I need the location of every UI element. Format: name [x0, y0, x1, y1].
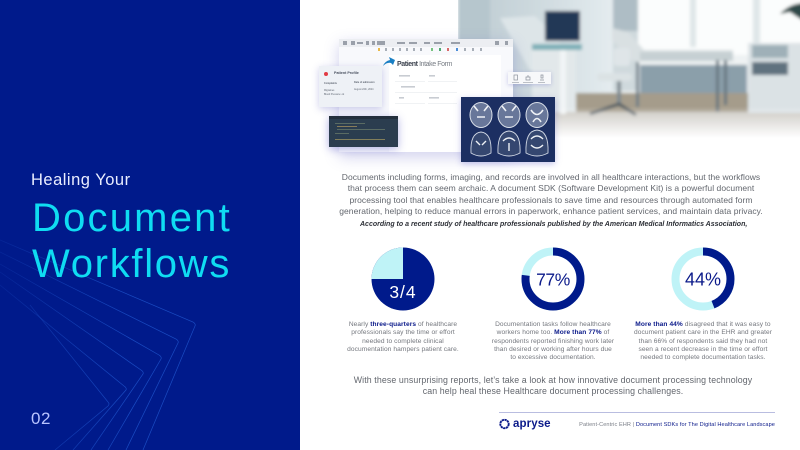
chart: 44% donut: 44% — [685, 270, 721, 290]
intro paragraph: generation, helping to reduce manual errors in paperwork, enhance patient services, and maintain data privacy. — [339, 206, 763, 216]
mockup: small action toolbar — [508, 72, 551, 84]
caption: 44%: document patient care in the EHR and greater — [634, 329, 772, 336]
caption: 44%: needed to complete documentation tasks. — [640, 354, 766, 361]
page number: 02 — [31, 409, 51, 428]
form fields — [395, 75, 457, 104]
card: patient profile: Complaints — [324, 82, 337, 85]
heading: Healing Your: Healing Your — [31, 171, 131, 189]
closing paragraph — [354, 375, 752, 396]
card: patient profile: August 24th, 2024 — [354, 88, 373, 91]
image: brain MRI scans — [461, 97, 555, 162]
panel: left blue panel — [0, 0, 300, 450]
profile text: Patient Profile — [334, 71, 359, 75]
mockup: document editor window — [339, 39, 513, 152]
logo: apryse — [499, 418, 551, 430]
icon: apryse mark — [499, 418, 510, 430]
caption: 77% — [492, 321, 614, 361]
caption: 44%: than 66% of respondents said they had not — [639, 338, 767, 345]
closing paragraph: With these unsurprising reports, let’s take a look at how innovative document processing technology — [354, 375, 752, 385]
caption: three-quarters: Nearly three-quarters of healthcare — [349, 321, 457, 328]
caption: three-quarters: needed to complete clinical — [362, 338, 444, 345]
card: patient profile: Date of admission — [354, 81, 375, 84]
caption: 77%: Documentation tasks follow healthcare — [495, 321, 611, 328]
heading: Document Workflows — [32, 196, 232, 286]
caption: 44%: seen a recent decrease in the time or effort — [638, 346, 768, 353]
closing paragraph: can help heal these Healthcare document processing challenges. — [423, 386, 683, 396]
footer text: Patient-Centric EHR | Document SDKs for The Digital Healthcare Landscape — [579, 422, 775, 428]
card: patient profile: Blood Pressure: ok — [324, 92, 344, 96]
photo: blurred clinic room — [458, 0, 800, 134]
editor toolbar — [339, 39, 513, 51]
caption: 44% — [634, 321, 772, 361]
chart: 3/4 pie — [372, 248, 434, 310]
form page — [389, 55, 501, 152]
decorative line pattern — [0, 240, 196, 450]
caption: 77%: to excessive documentation. — [510, 354, 596, 361]
heading: Document Workflows: Workflows — [32, 242, 231, 286]
caption: 77%: workers home too. More than 77% of — [497, 329, 609, 336]
icon: red marker — [324, 72, 328, 76]
caption: three-quarters — [347, 321, 459, 353]
chart: 3/4 pie: 3/4 — [389, 282, 417, 302]
logo wordmark: apryse — [513, 418, 551, 430]
footer rule — [499, 412, 775, 413]
intro paragraph: that process them can seem archaic. A document SDK (Software Development Kit) is a powerful document — [348, 183, 754, 193]
intro paragraph: processing tool that enables healthcare professionals to save time and resources through automated form — [350, 195, 752, 205]
intro paragraph: Documents including forms, imaging, and records are involved in all healthcare interactions, but the workflows — [342, 172, 760, 182]
chart: 77% donut — [522, 248, 584, 310]
heading: Document Workflows: Document — [32, 196, 232, 240]
intro paragraph — [339, 172, 763, 216]
chart: 44% donut — [672, 248, 734, 310]
card: patient profile: Migraines — [324, 89, 334, 92]
caption: three-quarters: professionals say the time or effort — [351, 329, 455, 336]
caption: three-quarters: documentation hampers patient care. — [347, 346, 459, 353]
caption: 44%: More than 44% disagreed that it was easy to — [635, 321, 771, 328]
caption: 77%: than desired or working after hours due — [494, 346, 612, 353]
chart: 77% donut: 77% — [536, 270, 570, 290]
card: patient profile — [319, 66, 382, 107]
study attribution line: According to a recent study of healthcare professionals published by the American Medical Informatics Association, — [360, 221, 747, 228]
card: dark code editor — [329, 116, 398, 147]
icon: arrow — [383, 57, 395, 66]
caption: 77%: respondents reported finishing work later — [492, 338, 614, 345]
form title: Patient Intake Form — [397, 61, 452, 68]
